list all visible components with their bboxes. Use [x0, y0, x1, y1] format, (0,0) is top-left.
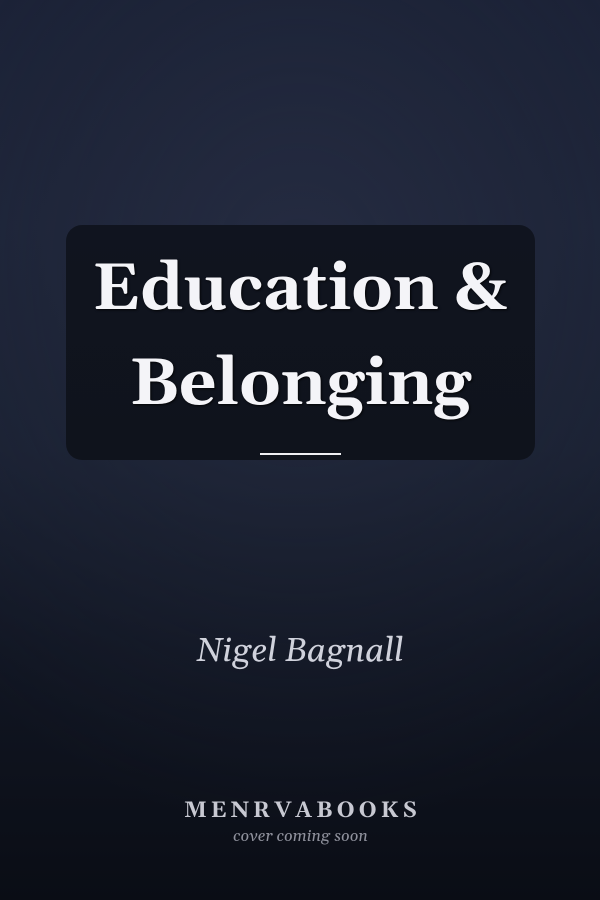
title: Education &	[92, 249, 508, 332]
title: Belonging	[129, 344, 471, 427]
author: Nigel Bagnall	[196, 631, 404, 673]
publisher: MENRVABOOKS	[184, 797, 421, 825]
title underline	[260, 453, 341, 455]
title panel	[66, 225, 535, 460]
cover note: cover coming soon	[233, 826, 368, 847]
title	[92, 249, 508, 427]
